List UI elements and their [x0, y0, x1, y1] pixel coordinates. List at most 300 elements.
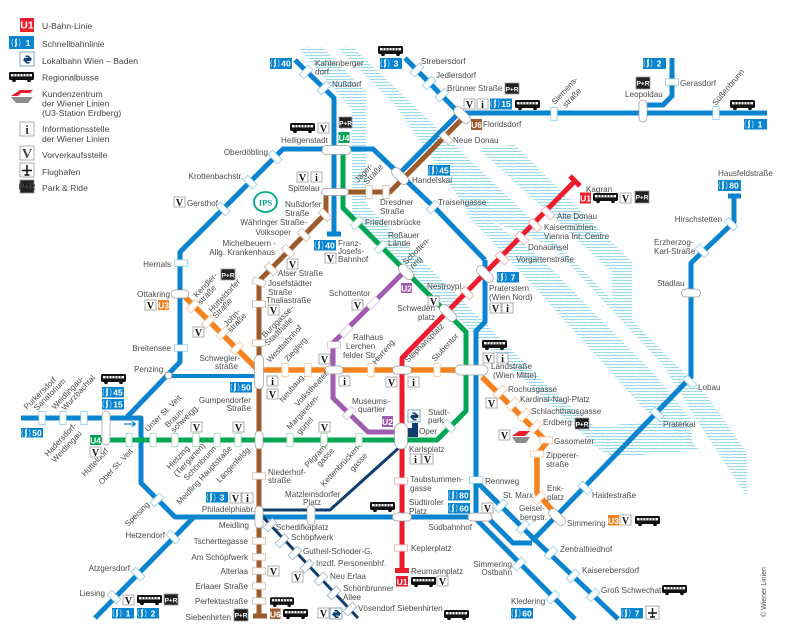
badge: S50 west — [21, 428, 43, 438]
panel: station names east: Kardinal-Nagl-Platz — [520, 395, 590, 404]
stations: U6 — [252, 131, 453, 604]
panel: station names east: Haidestraße — [592, 491, 637, 500]
panel: info boxes: i — [506, 304, 509, 315]
panel: info boxes — [242, 99, 513, 505]
panel: station names right-aligned west: straße — [215, 362, 238, 371]
panel: station names right-aligned west: Allg. Krankenhaus — [209, 248, 275, 257]
panel: V boxes — [90, 99, 631, 620]
panel: rotated station names: Burggasse- — [260, 304, 296, 339]
badge: S40 north — [270, 58, 292, 69]
line: S40 north — [295, 60, 341, 234]
panel: rotated station names: Penzing — [134, 365, 163, 374]
legend icon: info — [20, 122, 34, 137]
line: S80 — [532, 196, 741, 541]
panel: V boxes: V — [176, 198, 184, 209]
panel: station names centre: Taubstummen- — [410, 475, 464, 484]
legend icon: bus — [9, 72, 34, 82]
panel: station names east: bergstr. — [520, 513, 547, 522]
badge: S3 north — [380, 58, 402, 69]
line: S50 horizontal — [21, 418, 480, 517]
panel: V boxes: V — [299, 173, 307, 184]
legend text: Informationsstelle: Informationsstelle — [42, 124, 110, 134]
panel: station names north: Karl-Straße — [654, 247, 696, 256]
panel: V boxes: V — [439, 577, 447, 588]
stations: U4 — [126, 216, 456, 446]
panel: V boxes: V — [147, 301, 155, 312]
panel: station names right-aligned west: Hetzendorf — [125, 531, 166, 540]
panel: station names north: Donauinsel — [528, 243, 569, 252]
badge: S1 Liesing: 1 — [126, 608, 131, 618]
panel: station names centre: Schöpfwerk — [291, 533, 334, 542]
line: Liesing branch — [95, 517, 194, 618]
legend text: Schnellbahnlinie: Schnellbahnlinie — [42, 39, 105, 49]
panel: station names east: Zipperer- — [546, 451, 579, 460]
panel: V boxes: V — [485, 354, 493, 365]
legend icon: Kundenzentrum — [11, 90, 33, 103]
legend icon: Lokalbahn — [20, 52, 34, 66]
panel: station names right-aligned west: Hirschstetten — [675, 215, 722, 224]
panel: station names east: Kaiserebersdorf — [582, 566, 640, 575]
panel: info boxes: i — [343, 377, 346, 388]
badge: IPS: IPS — [259, 198, 272, 208]
badge: S2 Liesing: 2 — [151, 608, 156, 618]
badge: U6 Siebenhirten: U6 — [270, 610, 281, 620]
panel: station names centre: Josefstädter — [268, 279, 312, 288]
badge: S3 north: 3 — [394, 58, 399, 68]
panel: station names north: Spittelau — [288, 184, 320, 193]
badge: U3 Simmering: U3 — [608, 516, 619, 526]
badge: S1 east: 1 — [758, 120, 763, 130]
panel: station names centre: Museums- — [352, 397, 390, 406]
panel: station names north: Leopoldau — [625, 90, 663, 99]
badge: S15 north — [490, 98, 512, 110]
stations: U1 — [394, 206, 555, 551]
panel: station names right-aligned west: Atzgersdorf — [89, 564, 131, 573]
panel: rotated station names: gürtel — [295, 415, 315, 436]
icon: airport — [646, 606, 659, 619]
line: S7 Schwechat — [476, 481, 618, 619]
panel: station names right-aligned west — [79, 148, 722, 622]
panel: V boxes: V — [354, 301, 362, 312]
panel: rotated station names: Hadersdorf- — [43, 421, 79, 458]
panel: info boxes: i — [271, 377, 274, 388]
line: Simmering connector — [490, 520, 532, 543]
panel: station names north: Neue Donau — [453, 136, 498, 145]
badge: U4 Heiligenstadt: U4 — [339, 133, 350, 143]
panel: station names east: straße — [546, 460, 569, 469]
legend icon: U-Bahn: U1 — [20, 20, 34, 32]
panel: station names north: Lobau — [698, 383, 721, 392]
panel: park and ride boxes: P+R — [339, 120, 352, 127]
panel: rotated station names — [22, 235, 461, 528]
panel: station names right-aligned west: Tscherttegasse — [194, 537, 248, 546]
panel: station names right-aligned west: Liesing — [79, 589, 105, 598]
panel: rotated station names: Sanatorium — [32, 377, 68, 412]
panel: rotated station names: Meidling Hauptstraße — [175, 444, 234, 506]
badge: U6 Floridsdorf: U6 — [471, 120, 482, 130]
panel: station names centre: (Wien Mitte) — [493, 371, 537, 380]
panel: park and ride boxes — [164, 77, 650, 621]
panel: station names north: Süßenbrunn — [711, 67, 746, 107]
panel: station names centre: Südtiroler — [409, 498, 444, 507]
panel: V boxes: V — [232, 494, 240, 505]
panel: station names right-aligned west: platz — [418, 313, 435, 322]
panel: park and ride boxes: P+R — [235, 612, 248, 620]
panel: station names north: Roßauer — [388, 231, 420, 240]
badge: U1 Kagran: U1 — [580, 194, 591, 204]
panel: U-Bahn line badges — [90, 119, 619, 620]
legend text: Regionalbusse: Regionalbusse — [42, 72, 99, 82]
panel: V boxes: V — [388, 378, 396, 389]
panel: rotated station names: John- — [222, 307, 242, 328]
panel: V boxes: V — [235, 423, 243, 434]
panel: info boxes: i — [501, 354, 504, 365]
badge: U2 Karlsplatz: U2 — [382, 417, 393, 427]
panel: station names north: Nußdorf — [332, 80, 362, 89]
panel: info boxes: i — [481, 100, 484, 111]
panel: station names right-aligned west: Siebenhirten — [186, 613, 231, 622]
panel: station names north: Jedlersdorf — [436, 71, 477, 80]
panel: rotated station names: Unter St. Veit — [143, 393, 184, 433]
line: U1 terminus Kagran — [568, 174, 582, 188]
badge: S7 Praterstern — [497, 272, 519, 282]
panel: station names north — [281, 57, 773, 429]
panel: rotated station names: Hütteldorf — [80, 446, 111, 478]
panel: station names centre — [187, 199, 537, 613]
badge: S40 FJB: 40 — [325, 240, 335, 250]
panel: station names right-aligned west: Währinger Straße- — [240, 218, 307, 227]
panel: station names centre: felder Str. — [343, 351, 378, 360]
panel: station names east — [485, 385, 662, 606]
line: S60 Kledering — [477, 520, 575, 619]
panel: station names east: Rennweg — [485, 477, 519, 486]
badge: S2 north: 2 — [657, 58, 662, 68]
panel: water hatching (Danube and canals) — [298, 47, 747, 497]
panel: rotated station names: Stubentor — [430, 331, 461, 363]
legend text: Kundenzentrum — [42, 89, 121, 118]
panel: station names centre: Josefs- — [338, 247, 364, 256]
panel: station names east: Zentralfriedhof — [560, 545, 613, 554]
panel: park and ride boxes: P+R — [636, 194, 649, 202]
panel: station names centre: Gersthof — [187, 199, 219, 208]
panel: V boxes: V — [321, 355, 329, 366]
panel: rotated station names: Schotten- — [401, 235, 432, 266]
panel: info boxes: i — [246, 494, 249, 505]
panel: station names north: Nußdorfer — [285, 200, 322, 209]
badge: S1 Liesing — [112, 608, 134, 618]
panel: rotated station names: Braun- — [163, 406, 187, 429]
panel: station names right-aligned west: Perfektastraße — [195, 597, 248, 606]
panel: station names east: Erdberg — [543, 418, 572, 427]
panel: station names right-aligned west: Ostbahn — [481, 568, 512, 577]
panel: rotated station names: Volkstheater — [293, 369, 330, 408]
panel: V boxes: V — [92, 448, 100, 459]
panel: station names right-aligned west: Am Schöpfwerk — [191, 553, 249, 562]
panel: rotated station names: straße — [196, 283, 218, 306]
panel: rotated station names: Hütteldorfer — [207, 277, 243, 314]
legend icon: V: V — [22, 147, 32, 162]
panel: V boxes: V — [195, 328, 203, 339]
panel: station names centre: Lerchen — [346, 342, 375, 351]
panel: station names centre: Bahnhof — [338, 255, 369, 264]
panel: rotated station names: Hietzing — [165, 444, 191, 471]
line: Badner Bahn lower — [262, 516, 358, 618]
panel: info boxes: i — [315, 173, 318, 184]
panel: station names north: Straße — [285, 209, 310, 218]
panel: station names north: Straße — [380, 207, 405, 216]
panel: station names east: Geisel- — [519, 504, 545, 513]
badge: S50 West: 50 — [241, 382, 251, 392]
line: Rennweg trunk — [476, 260, 485, 517]
panel: park and ride boxes: P+R — [222, 272, 235, 279]
panel: station names right-aligned west: Oberdöbling — [224, 148, 268, 157]
panel: V boxes: V — [289, 260, 297, 271]
legend text: Park & Ride: Park & Ride — [42, 183, 88, 193]
panel: V boxes: V — [294, 573, 302, 584]
panel: station names east: Gasometer — [554, 437, 594, 446]
panel: rotated station names: Stephansplatz — [403, 322, 446, 364]
badge: S80 Hausfeld — [718, 180, 741, 191]
badge: S60 Kledering: 60 — [522, 608, 532, 618]
panel: station names centre: Oper — [419, 427, 437, 436]
arrow: S50 direction — [124, 422, 136, 426]
line: U3 — [185, 297, 552, 510]
legend icon: V — [20, 146, 34, 162]
badge: S50 West — [230, 382, 252, 392]
badge: U2 Schottenring: U2 — [401, 284, 412, 294]
badge: S15 north: 15 — [501, 99, 511, 109]
panel: station names right-aligned west: Ottakring — [137, 290, 170, 299]
panel: station names centre: Reumannplatz — [411, 567, 463, 576]
panel: station names right-aligned west: Krottenbachstr. — [189, 172, 243, 181]
badge: S80 Südbahnhof — [448, 490, 470, 500]
panel: station names centre: Niederhof- — [268, 468, 306, 477]
panel: station names centre: Gutheil-Schoder-G. — [303, 547, 373, 556]
panel: V boxes: V — [424, 455, 432, 466]
panel: station names centre: Alser Straße — [278, 269, 323, 278]
panel: V boxes: V — [327, 254, 335, 265]
panel: rotated station names: Wurzbachtal — [60, 373, 97, 412]
panel: station names east: Rochusgasse — [508, 385, 558, 394]
panel: station names centre: Thaliastraße — [266, 296, 311, 305]
panel: station names right-aligned west: Erlaaer Straße — [195, 582, 248, 591]
badge: S60 Kledering — [511, 608, 533, 618]
panel: rotated station names: Weidlingau — [50, 429, 84, 464]
panel: station names north: Kagran — [586, 185, 612, 194]
panel: station names north: Gerasdorf — [680, 79, 717, 88]
badge: S3 Philadelphia: 3 — [220, 492, 225, 502]
panel: station names centre: quartier — [358, 405, 386, 414]
legend text: Lokalbahn: Lokalbahn Wien – Baden — [42, 56, 138, 66]
line: Badner Bahn upper — [258, 445, 402, 510]
badge: S45 Hütteldorf — [102, 387, 124, 398]
icon: Lokalbahn at Oper — [408, 410, 420, 422]
panel: V boxes: V — [193, 423, 201, 434]
panel: station names right-aligned west: Alterlaa — [221, 567, 248, 576]
stations: U3 — [186, 299, 553, 505]
panel: station names north: Kaisermühlen- — [544, 223, 596, 232]
panel: station names right-aligned west: Südbahnhof — [428, 523, 473, 532]
panel: V boxes: V — [320, 609, 328, 620]
panel: rotated station names: schweigg. — [169, 403, 201, 434]
panel: station names right-aligned west: Hernals — [143, 260, 171, 269]
panel: station names centre: Landstraße — [491, 362, 532, 371]
panel: station names north: Strebersdorf — [421, 57, 466, 66]
panel: station names north: Kahlenberger — [315, 59, 364, 68]
legend icon: S-Bahn: 1 — [26, 38, 31, 48]
panel: station names centre: Schönbrunner — [343, 584, 394, 593]
panel: station names north: Jäger- — [353, 161, 375, 184]
badge: IPS — [254, 192, 277, 212]
panel: station names centre: Inzdf. Personenbhf. — [316, 559, 386, 568]
panel: rotated station names: Purkersdorf — [22, 375, 59, 411]
badge: S45 Handelskai: 45 — [439, 166, 449, 176]
badge: S40 north: 40 — [281, 58, 291, 68]
panel: station names centre: Schedifkaplatz — [276, 523, 329, 532]
panel: station names east: Simmering — [567, 519, 606, 528]
legend text: Informationsstelle — [42, 124, 110, 144]
panel: rotated station names: Stadthalle — [263, 315, 295, 347]
panel: rotated station names: Straße — [211, 296, 234, 320]
panel: V boxes: V — [484, 504, 492, 515]
line: Penzing branch — [168, 374, 258, 378]
panel: park and ride boxes: P+R — [637, 80, 650, 88]
panel: V boxes: V — [622, 194, 630, 205]
panel: rotated station names: Pilgram- — [303, 441, 330, 469]
panel: station names right-aligned west: Gumpendorfer — [199, 396, 251, 405]
panel: station names centre: Platz — [303, 498, 321, 507]
panel: station names centre: Praterstern — [489, 284, 529, 293]
panel: station names right-aligned west: Schwegler- — [200, 354, 240, 363]
badge: S1 east — [744, 119, 767, 130]
panel: rotated station names: Kettenbrücken- — [319, 442, 363, 488]
panel: station names north: Praterkai — [663, 420, 696, 429]
badge: S50 west: 50 — [32, 428, 42, 438]
panel: station names right-aligned west: Straße — [227, 404, 251, 413]
panel: station names north: Straße — [362, 162, 385, 186]
panel: station names north: Floridsdorf — [483, 120, 522, 129]
panel: park and ride boxes: P+R — [506, 86, 519, 93]
panel: V boxes: V — [125, 596, 133, 607]
panel: rotated station names: ring — [408, 255, 424, 270]
panel: station names centre: Stadt- — [428, 408, 450, 417]
panel: station names centre: park — [428, 416, 445, 425]
panel: V boxes: V — [320, 124, 328, 135]
icon: Kundenzentrum Erdberg — [512, 431, 530, 443]
panel: rotated station names: Weidlingau- — [50, 374, 86, 411]
panel: station names north: Dresdner — [380, 198, 414, 207]
badge: S15 Hütteldorf: 15 — [113, 400, 123, 410]
badge: S3 Philadelphia — [206, 492, 228, 502]
legend text: Informationsstelle: der Wiener Linien — [42, 134, 110, 144]
line: S45 Floridsdorf — [398, 114, 458, 175]
panel: V boxes: V — [622, 516, 630, 527]
legend icon: airport — [20, 163, 34, 177]
panel: station names right-aligned west: Michelbeuern - — [222, 239, 276, 248]
panel: rotated station names: (Tiergarten) — [172, 441, 207, 478]
line: U6 — [253, 119, 462, 616]
stations: Badner Bahn — [263, 518, 357, 616]
panel: station names right-aligned west: Philadelphiabr. — [202, 505, 255, 514]
panel: rotated station names: Längenfeldg. — [215, 444, 253, 484]
legend icon: S-Bahn — [9, 36, 34, 49]
line: U1 terminus Reumannplatz — [395, 568, 409, 573]
panel: station names north: Siemens- — [550, 75, 580, 106]
panel: station names right-aligned west: Simmering — [473, 560, 512, 569]
panel: station names centre: Franz- — [338, 239, 362, 248]
badge: S7 Schwechat: 7 — [635, 608, 640, 618]
badge: S80 Hausfeld: 80 — [729, 180, 739, 190]
panel: info boxes: i — [412, 378, 415, 389]
legend text: Kundenzentrum: Kundenzentrum — [42, 89, 103, 99]
stations: U2 — [328, 296, 380, 420]
panel: V boxes: V — [269, 390, 277, 401]
panel: regional bus icons — [101, 46, 755, 620]
badge: S40 FJB — [314, 240, 336, 250]
panel: V boxes: V — [466, 100, 474, 111]
badge: S7 Schwechat — [621, 608, 643, 618]
panel: station names north: Erzherzog- — [654, 238, 694, 247]
panel: station names right-aligned west: Volksoper — [255, 228, 291, 237]
line: S2 — [645, 58, 672, 105]
panel: station names north: Handelskai — [412, 176, 452, 185]
panel: station names centre: Matzleinsdorfer — [285, 490, 341, 499]
line: U1 — [402, 181, 575, 570]
badge: S15 Hütteldorf — [102, 399, 124, 410]
copyright: © Wiener Linien — [760, 567, 768, 617]
legend text: Kundenzentrum: der Wiener Linien — [42, 98, 110, 108]
panel: small station markers — [39, 63, 738, 616]
panel: rotated station names: gasse — [348, 451, 370, 473]
panel: station names north: Heiligenstadt — [281, 136, 329, 145]
panel: V boxes: V — [321, 423, 329, 434]
panel: V boxes: V — [270, 306, 278, 317]
panel: rotated station names: Schönbrunn — [182, 444, 218, 482]
panel: rotated station names: straße — [226, 311, 248, 334]
panel: park and ride boxes: P+R — [576, 421, 589, 428]
panel: station names centre: Rathaus — [353, 333, 383, 342]
panel: interchange pills — [102, 100, 700, 528]
panel: station names centre: Platz — [409, 507, 427, 516]
panel: rotated station names: Margareten- — [285, 393, 322, 431]
line: S1 top — [462, 110, 767, 116]
badge: S60 Südbahnhof — [448, 503, 470, 514]
panel: station names centre: gasse — [410, 484, 432, 493]
panel: station names east: platz — [547, 493, 564, 502]
panel: rotated station names: Neubaug. — [278, 372, 307, 404]
panel: station names north: Brünner Straße — [447, 84, 503, 93]
panel: station names centre: Straße — [268, 288, 293, 297]
panel: station names centre: straße — [268, 476, 291, 485]
panel: rotated station names: gasse — [315, 446, 337, 468]
panel: station names centre: Allee — [343, 593, 361, 602]
panel: station names east: St. Marx — [503, 491, 533, 500]
panel: station names north: Vienna Int. Centre — [544, 232, 610, 241]
panel: V boxes: V — [492, 304, 500, 315]
panel: station names centre: Neu Erlaa — [330, 572, 366, 581]
legend text: Vorverkaufsstelle: Vorverkaufsstelle — [42, 150, 108, 160]
panel: rotated station names: Zieglerg. — [283, 334, 311, 363]
panel: station names north: Stadlau — [657, 279, 684, 288]
panel: station names centre: (Wien Nord) — [489, 293, 533, 302]
panel: V boxes: V — [430, 297, 438, 308]
panel: station names centre: Vösendorf Siebenhirten — [358, 604, 443, 613]
legend text: Kundenzentrum: (U3-Station Erdberg) — [42, 108, 121, 118]
legend text: U-Bahn-Linie: U-Bahn-Linie — [42, 21, 92, 31]
panel: V boxes: V — [270, 567, 278, 578]
badge: S2 north — [643, 58, 666, 69]
badge: S2 Liesing — [137, 608, 159, 618]
